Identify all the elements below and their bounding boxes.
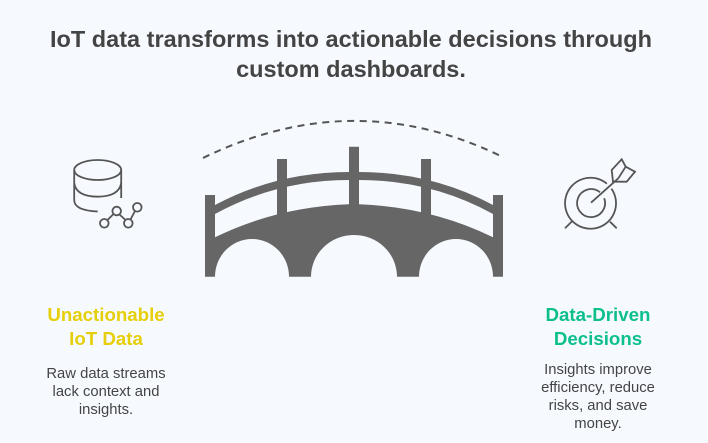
heading: unactionable iot data: IoT Data [69, 328, 143, 349]
text: data-driven description: Insights improve [544, 362, 652, 378]
bridge structure [205, 147, 503, 277]
heading: data-driven decisions [546, 304, 650, 349]
title: IoT data transforms into actionable decisions through [50, 26, 652, 52]
text: data-driven description: money. [574, 416, 622, 432]
bridge posts [277, 159, 431, 215]
text: data-driven description [541, 362, 655, 432]
text: unactionable description: insights. [79, 402, 133, 418]
illustration: bridge [203, 121, 503, 277]
title [50, 26, 652, 82]
text: data-driven description: efficiency, reduce [541, 380, 655, 396]
icon: target with arrow [565, 159, 635, 229]
heading: unactionable iot data: Unactionable [47, 304, 165, 325]
title: custom dashboards. [236, 56, 466, 82]
heading: data-driven decisions: Decisions [554, 328, 642, 349]
dashed arc [203, 121, 500, 158]
text: unactionable description: Raw data streams [46, 366, 166, 382]
heading: data-driven decisions: Data-Driven [546, 304, 650, 325]
text: data-driven description: risks, and save [549, 398, 647, 414]
heading: unactionable iot data [47, 304, 165, 349]
text: unactionable description [46, 366, 166, 418]
icon: database with line chart [74, 160, 142, 228]
text: unactionable description: lack context and [53, 384, 159, 400]
